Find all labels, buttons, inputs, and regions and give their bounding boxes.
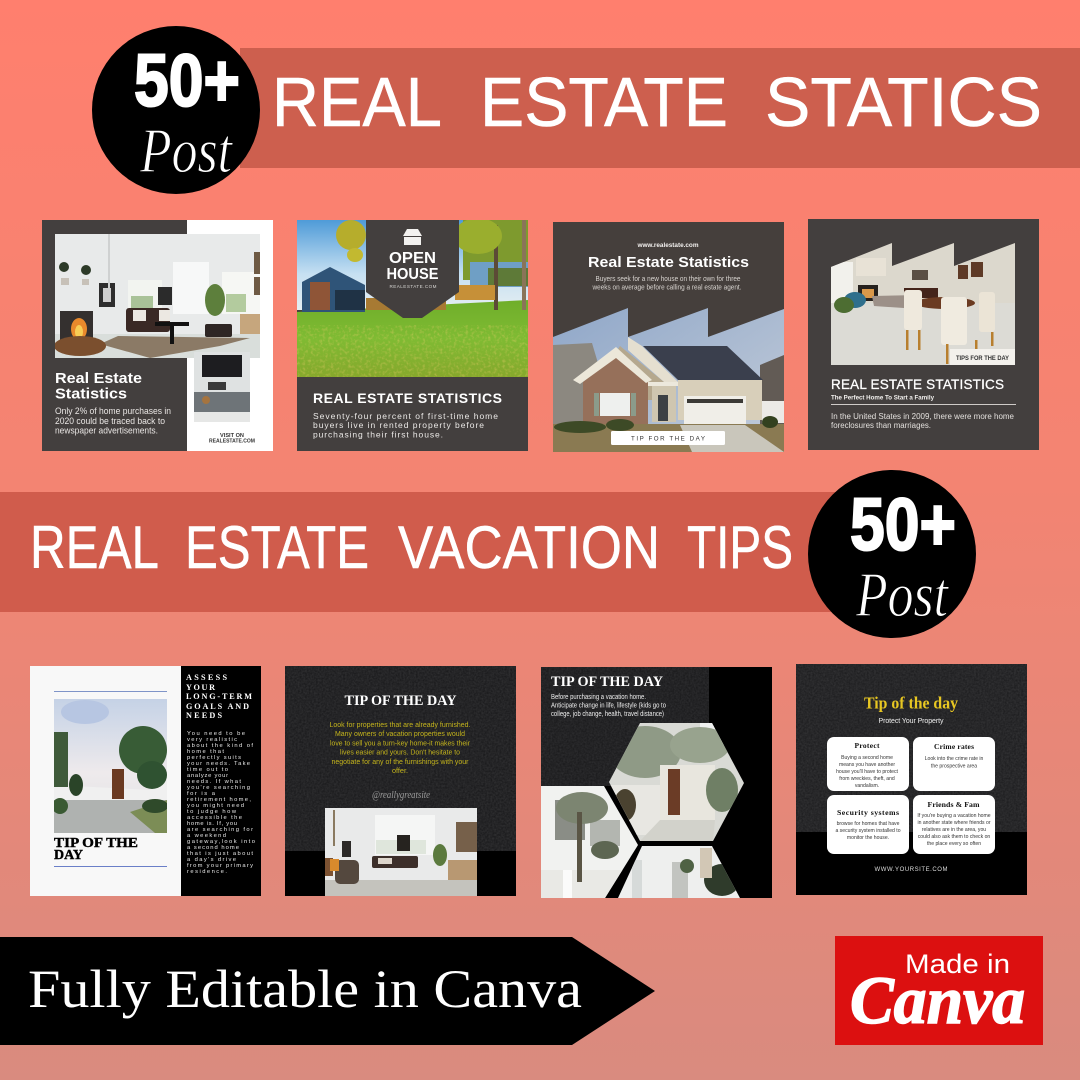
assess body: a second home: [187, 845, 239, 851]
card 6 yellow text: negotiate for any of the furnishings with your: [332, 757, 469, 766]
card 8 url: WWW.YOURSITE.COM: [874, 867, 948, 873]
photo: hex entrance: [609, 723, 744, 841]
box: security systems: monitor the house.: [847, 835, 889, 841]
site label: www.realestate.com: [636, 242, 699, 249]
arrow banner text: Fully Editable in Canva: [28, 959, 582, 1019]
open house shield: [366, 220, 459, 318]
card 7 body: [551, 694, 666, 718]
assess heading: NEEDS: [186, 711, 222, 720]
card 4: tips for the day: [808, 219, 1039, 450]
badge number: 50+: [134, 39, 240, 122]
card 1 visit label: REALESTATE.COM: [209, 438, 255, 444]
card 6 yellow text: Many owners of vacation properties would: [335, 729, 465, 738]
heading: real estate statics: ESTATE: [480, 63, 728, 141]
box: security systems: browse for homes that have: [837, 821, 900, 827]
banner: real estate statics: [240, 48, 1080, 168]
box: protect: Protect: [854, 741, 880, 750]
box: friends and fam: [913, 795, 995, 854]
tips label: [950, 349, 1015, 365]
box: crime rates: Look into the crime rate in: [925, 756, 983, 762]
assess body: to judge how: [187, 809, 237, 815]
card 2 heading: REAL ESTATE STATISTICS: [313, 390, 502, 406]
card 7 body: Before purchasing a vacation home.: [551, 694, 646, 701]
card 8: tip of the day grid: [796, 664, 1027, 895]
card 1 body: Only 2% of home purchases in: [55, 405, 171, 416]
assess heading: [186, 673, 252, 720]
card 4 heading: REAL ESTATE STATISTICS: [831, 377, 1004, 392]
card 4 body: [831, 412, 1015, 430]
card 6: tip of the day furnished: [285, 666, 516, 896]
box: friends and fam: could also ask them to check on: [918, 834, 990, 840]
photo: white modern house and tree: [52, 699, 168, 833]
card 4 subtitle: The Perfect Home To Start a Family: [831, 394, 935, 402]
card 8 subtitle: Protect Your Property: [878, 718, 944, 725]
badge number: 50+: [850, 483, 956, 566]
assess body: time out to: [187, 767, 228, 773]
card 6 yellow text: [330, 720, 470, 775]
heading: real estate statics: [272, 63, 1042, 141]
heading: real estate vacation tips: ESTATE: [185, 514, 369, 581]
badge: 50+ post top: [92, 26, 260, 194]
card 7: tip of the day hexagons: [541, 667, 772, 898]
open house label: [386, 250, 438, 283]
card 1 title line two: Statistics: [55, 386, 127, 402]
card 2 body: purchasing their first house.: [313, 430, 443, 440]
open house label: OPEN: [389, 250, 436, 267]
card 3 body: weeks on average before calling a real estate agent.: [592, 282, 742, 292]
box: protect: Buying a second home: [841, 755, 893, 761]
open house label: HOUSE: [386, 266, 438, 283]
badge script word: Post: [139, 115, 234, 186]
heading: real estate vacation tips: REAL: [30, 514, 159, 581]
card 4 body: foreclosures than marriages.: [831, 421, 931, 430]
card 1 body: [55, 405, 171, 436]
photo: lawn and blue house: [297, 218, 528, 377]
card 7 body: college, job change, health, travel distance): [551, 711, 664, 718]
made in label: Made in: [905, 949, 1010, 979]
heading: real estate statics: STATICS: [765, 63, 1042, 141]
photo: suburban house: [553, 300, 784, 452]
card 6 yellow text: Look for properties that are already furnished.: [330, 720, 470, 729]
box: security systems: [827, 795, 909, 854]
assess body: your needs. Take: [187, 761, 250, 767]
heading: real estate vacation tips: TIPS: [687, 514, 793, 581]
card 1 body: 2020 could be traced back to: [55, 415, 165, 426]
photo: small tv room: [194, 352, 250, 422]
card 2: open house: [297, 218, 528, 451]
tip for the day button: [611, 431, 725, 445]
card 1: real estate statistics white room: [42, 220, 273, 451]
box: protect: means you have another: [839, 762, 895, 768]
card 1 visit label: [209, 433, 255, 444]
card 6 yellow text: offer.: [392, 766, 408, 775]
box: protect: from wreckies, theft, and: [839, 776, 895, 782]
dark stepped panel: [553, 222, 784, 337]
assess body: for is a: [187, 791, 216, 797]
arrow banner: fully editable: [0, 937, 655, 1045]
box: security systems: a security system installed to: [835, 828, 901, 834]
assess body: analyze your: [187, 773, 228, 779]
tip of the day heading: DAY: [54, 848, 83, 863]
card 6 heading: TIP OF THE DAY: [344, 693, 457, 709]
card 3 body: [592, 274, 742, 292]
canva wordmark: Canva: [850, 962, 1025, 1038]
badge: 50+ post middle: [808, 470, 976, 638]
banner: real estate vacation tips: [0, 492, 840, 612]
card 7 body: Anticipate change in life, lifestyle (kids go to: [551, 702, 666, 710]
assess heading: YOUR: [186, 683, 215, 692]
assess body: You need to be: [187, 731, 245, 737]
script handle: @reallygreatsite: [372, 790, 430, 801]
box: crime rates: the prospective area: [931, 764, 977, 770]
assess heading: ASSESS: [186, 673, 227, 682]
photo: living room with fireplace: [54, 234, 260, 358]
assess body: perfectly suits: [187, 755, 241, 761]
box: friends and fam: relatives are in the area, you: [922, 827, 986, 833]
tip for the day button: TIP FOR THE DAY: [631, 436, 705, 442]
assess body: you might need: [187, 803, 244, 809]
card 8 title: Tip of the day: [864, 694, 959, 712]
photo: hex palm building: [541, 786, 638, 898]
assess body: are searching for: [187, 827, 253, 833]
card 3 title: Real Estate Statistics: [588, 254, 749, 271]
badge: made in canva: [835, 936, 1043, 1045]
tips label: TIPS FOR THE DAY: [956, 356, 1009, 362]
badge script word: Post: [855, 559, 950, 630]
heading: real estate vacation tips: VACATION: [398, 514, 660, 581]
assess body: retirement home,: [187, 797, 251, 803]
card 3 body: Buyers seek for a new house on their own for three: [596, 274, 740, 283]
box: crime rates: [913, 737, 995, 791]
open house site: REALESTATE.COM: [390, 284, 437, 289]
box: security systems: Security systems: [837, 808, 899, 817]
box: protect: [827, 737, 909, 791]
assess body: very realistic: [187, 737, 237, 743]
box: friends and fam: If you're buying a vacation home: [917, 813, 991, 819]
card 5: long-term goals: [30, 666, 261, 896]
box: friends and fam: Friends & Fam: [928, 800, 980, 809]
card 4 body: In the United States in 2009, there were more home: [831, 412, 1015, 421]
icon: house: [403, 229, 422, 245]
box: friends and fam: in another state where friends or: [917, 820, 991, 826]
assess body: needs. If what: [187, 779, 241, 785]
card 6 yellow text: lives easier and yours. Don't hesitate to: [340, 748, 460, 756]
assess body: from your primary: [187, 863, 253, 869]
card 2 body: buyers live in rented property before: [313, 420, 484, 430]
box: protect: house you'll have to protect: [836, 769, 899, 775]
card 2 body: [313, 411, 498, 440]
box: friends and fam: the place every so often: [927, 841, 981, 847]
card 7 heading: TIP OF THE DAY: [551, 674, 663, 690]
assess body: you're searching: [187, 785, 250, 791]
photo: lounge room: [325, 808, 477, 896]
assess body: a weekend: [187, 833, 226, 839]
assess heading: LONG-TERM: [186, 692, 252, 701]
card 1 visit label: VISIT ON: [220, 433, 244, 439]
assess body: a day's drive: [187, 857, 236, 863]
box: crime rates: Crime rates: [934, 742, 974, 751]
assess body: home is. If, you: [187, 821, 237, 827]
heading: real estate statics: REAL: [272, 63, 442, 141]
assess body: residence.: [187, 869, 227, 875]
assess body: home that: [187, 749, 224, 755]
card 1 body: newspaper advertisements.: [55, 424, 158, 436]
photo: hex lower building: [618, 846, 740, 898]
heading: real estate vacation tips: [30, 514, 793, 581]
assess body: that is just about: [187, 851, 253, 857]
assess body: about the kind of: [187, 743, 253, 749]
card 6 yellow text: love to sell you a turn-key home-it makes their: [330, 738, 470, 748]
tip of the day heading: [54, 836, 138, 863]
tip of the day heading: TIP OF THE: [54, 836, 138, 851]
box: protect: vandalism.: [855, 783, 879, 789]
assess heading: GOALS AND: [186, 702, 249, 711]
assess body: [187, 731, 255, 875]
assess body: accessible the: [187, 815, 242, 821]
card 1 title: Real Estate: [55, 370, 142, 387]
photo: dining room: [831, 243, 1015, 365]
assess body: gateway,look into: [187, 839, 255, 845]
card 3: house photo: [553, 222, 784, 452]
card 2 body: Seventy-four percent of first-time home: [313, 411, 498, 421]
